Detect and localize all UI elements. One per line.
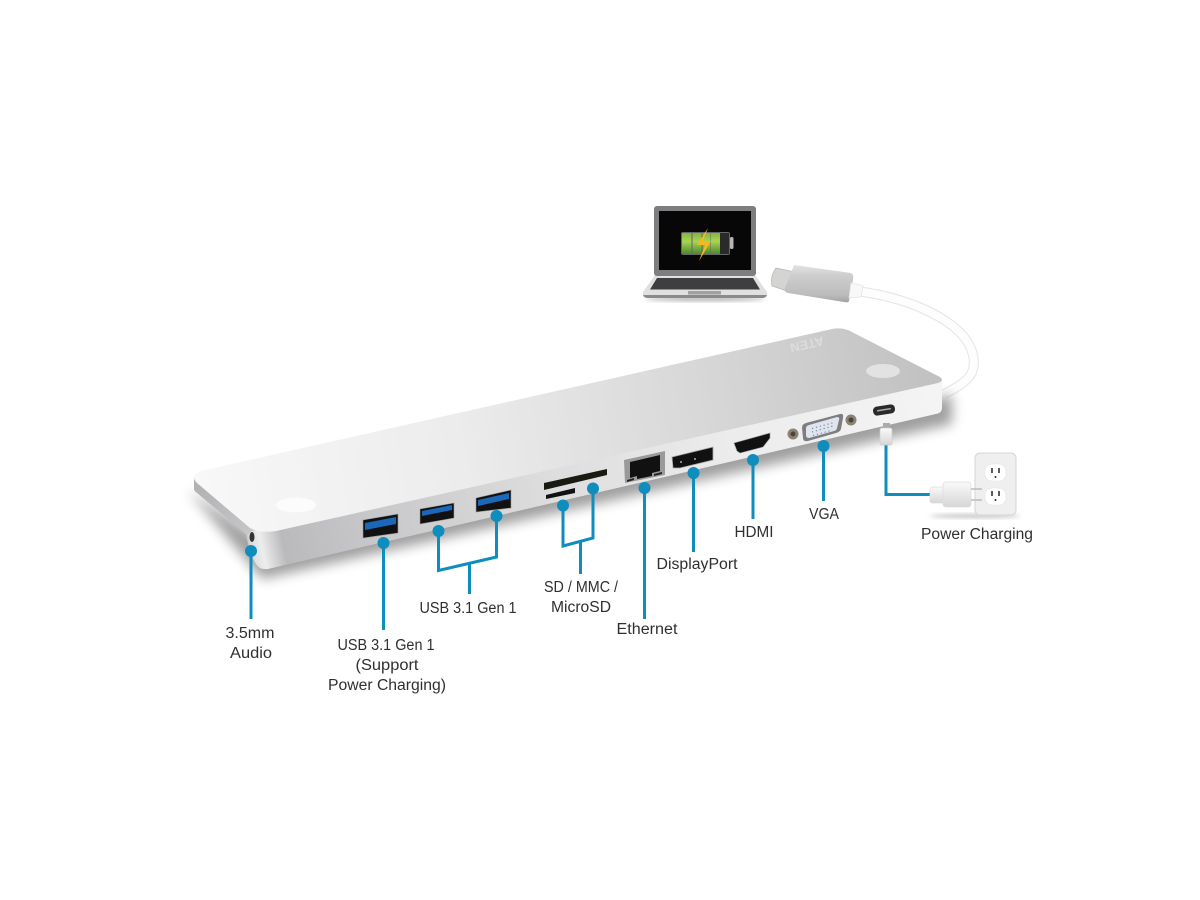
dock shadow (188, 395, 952, 579)
Ethernet port (624, 451, 665, 483)
battery icon (681, 228, 734, 261)
dock front face (248, 380, 942, 569)
charger strain relief (930, 487, 944, 503)
laptop base edge (643, 295, 767, 298)
dock body (194, 328, 942, 569)
brand mark: ATEN (789, 333, 825, 356)
callout: SD / MMC / MicroSD: SD / MMC / (544, 579, 619, 596)
callout: USB 3.1 Gen 1 pair: USB 3.1 Gen 1 (420, 600, 516, 617)
lower socket (985, 488, 1006, 505)
SD card slot (544, 469, 607, 490)
laptop trackpad (688, 291, 721, 294)
callout: Power Charging (880, 423, 1033, 543)
USB port 1 (363, 514, 398, 538)
laptop with charging battery (643, 206, 767, 301)
dock left side (194, 476, 270, 569)
connector tip (772, 268, 795, 292)
upper socket (985, 464, 1006, 481)
USB port 2 (420, 503, 454, 524)
callout: Power Charging: Power Charging (921, 526, 1033, 543)
VGA port (802, 414, 843, 441)
laptop shadow (645, 297, 765, 301)
laptop keyboard (650, 278, 760, 290)
audio jack (250, 532, 254, 542)
callout: Ethernet (616, 482, 678, 638)
DisplayPort port (672, 447, 713, 468)
HDMI port (734, 433, 770, 453)
charger body (943, 482, 971, 507)
wall outlet (975, 453, 1016, 515)
USB-C cable (772, 265, 974, 394)
callout: USB 3.1 Gen 1 Support Power Charging: (Support (356, 657, 419, 674)
rubber foot left (276, 498, 316, 512)
cable cord (856, 291, 974, 394)
callout: 3.5mm Audio: 3.5mm (226, 625, 274, 642)
callout: USB 3.1 Gen 1 pair (420, 510, 516, 617)
callout: SD / MMC / MicroSD (544, 482, 619, 616)
charging line (886, 444, 931, 494)
callout: HDMI: HDMI (734, 524, 774, 541)
callout: SD / MMC / MicroSD: MicroSD (551, 599, 611, 616)
VGA screw left (788, 428, 798, 440)
strain relief (849, 283, 863, 298)
rubber foot right (866, 364, 900, 378)
lightning bolt (697, 228, 711, 261)
USB-C plug (883, 423, 890, 429)
dock top surface (194, 328, 942, 532)
callout: USB 3.1 Gen 1 Support Power Charging: USB 3.1 Gen 1 (338, 637, 434, 654)
MicroSD slot (546, 488, 575, 499)
USB port 3 (476, 490, 511, 512)
callout: DisplayPort: DisplayPort (656, 556, 738, 573)
callout: 3.5mm Audio: Audio (230, 645, 272, 662)
callout: VGA (809, 440, 840, 523)
laptop lid (654, 206, 756, 276)
callout: USB 3.1 Gen 1 Support Power Charging: Power Charging) (328, 677, 446, 694)
laptop screen (659, 211, 751, 270)
laptop base (643, 275, 767, 298)
callout: Ethernet: Ethernet (616, 621, 678, 638)
ports (250, 404, 896, 542)
callout: 3.5mm Audio (226, 545, 274, 662)
callout: VGA: VGA (809, 506, 840, 523)
callout: USB 3.1 Gen 1 Support Power Charging (328, 537, 446, 694)
charger prongs (971, 489, 982, 500)
wall outlet shadow (930, 514, 1020, 518)
VGA screw right (846, 414, 856, 426)
callout: DisplayPort (656, 467, 738, 573)
callout: HDMI (734, 454, 774, 541)
connector housing (785, 265, 853, 302)
USB-C port (872, 404, 896, 416)
